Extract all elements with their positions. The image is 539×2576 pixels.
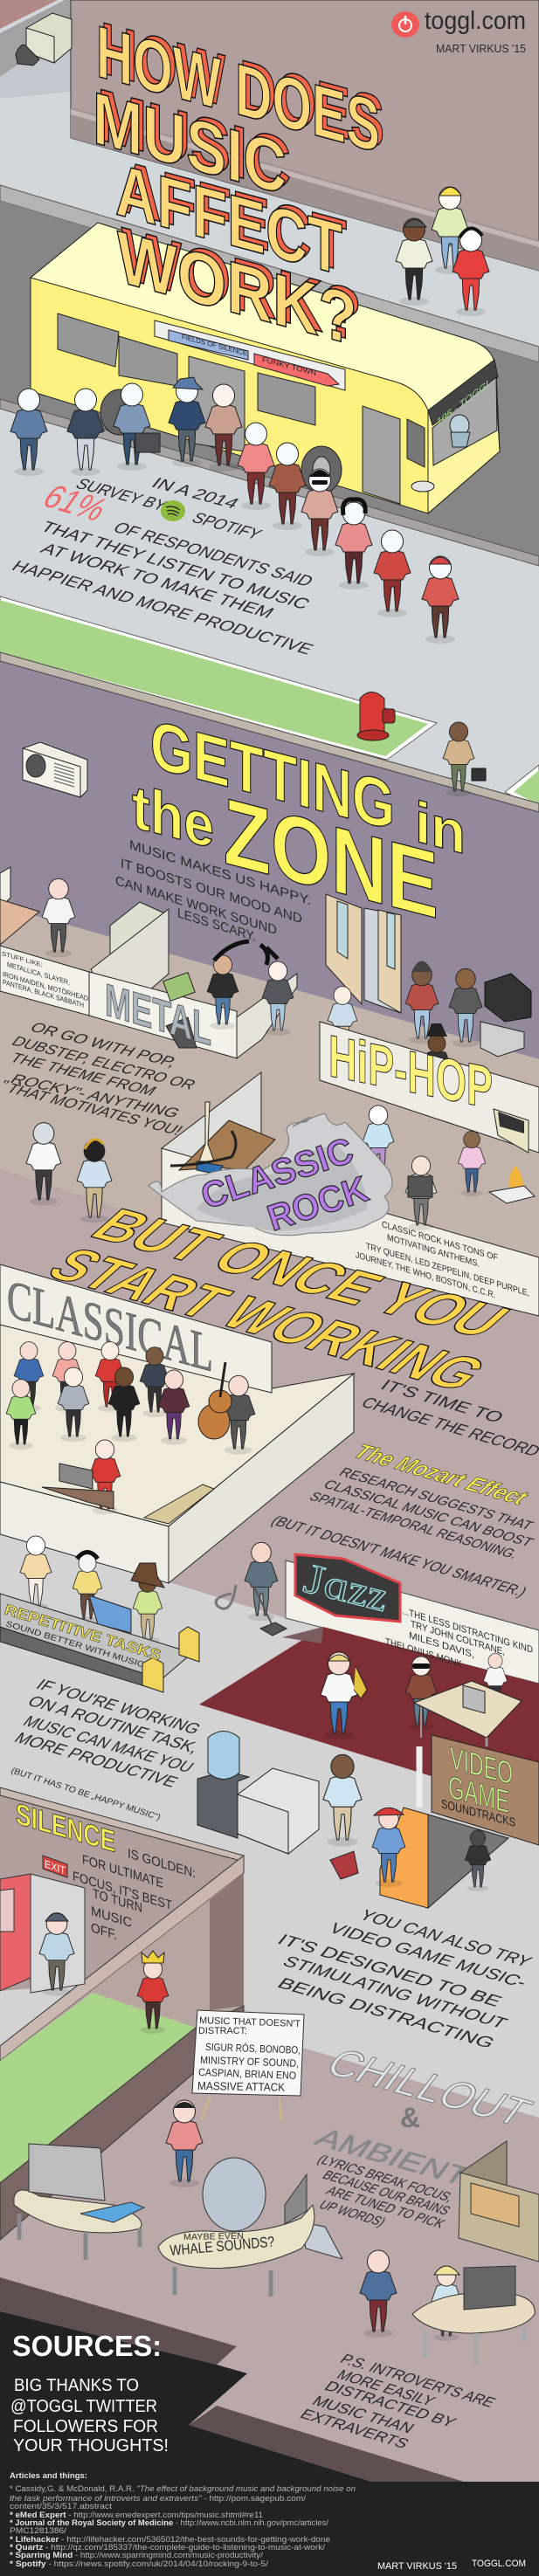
text: music makes us happy <box>115 837 311 945</box>
bus route sign <box>155 320 345 390</box>
panel: classic rock <box>149 1072 539 1316</box>
heading: chillout and ambient: AMBIENT <box>308 2124 476 2191</box>
title: AFFECT <box>120 145 347 288</box>
sources heading and thanks: BIG THANKS TO <box>14 2376 139 2395</box>
title: MUSIC <box>97 73 291 208</box>
character: man with clipboard <box>323 1754 362 1846</box>
bus route sign: FUNKY TOWN <box>262 355 316 377</box>
text: change the record: SPATIAL-TEMPORAL REASONING. <box>306 1490 522 1561</box>
sources heading and thanks: YOUR THOUGHTS! <box>13 2436 169 2455</box>
sources heading and thanks <box>10 2330 169 2455</box>
text: routine task: MORE PRODUCTIVE <box>10 1730 182 1791</box>
box and bag at top left <box>16 13 72 65</box>
characters: jazz musicians <box>321 1652 522 1746</box>
heading: but once you start working: START WORKING <box>34 1238 501 1400</box>
title: AFFECT <box>115 148 342 292</box>
heading: getting in the zone <box>132 705 466 940</box>
text: video game music <box>273 1907 536 2052</box>
text: music makes us happy: MUSIC MAKES US HAPPY. <box>129 837 311 908</box>
title <box>93 7 384 362</box>
exit door: EXIT <box>45 1857 66 1877</box>
panel: metal cubicle <box>0 867 297 1058</box>
sources list: * Spotify - https://news.spotify.com/uk/2014/04/10/rocking-9-to-5/ <box>10 2559 269 2568</box>
title: HOW DOES <box>100 7 384 165</box>
survey text: IN A 2014 <box>148 475 243 513</box>
panel: jazz <box>199 1553 539 1809</box>
survey text <box>8 475 317 658</box>
text: classic rock artists: JOURNEY, THE WHO, BOSTON, C.C.R. <box>356 1250 495 1300</box>
icon: spotify <box>161 500 185 521</box>
text: metal bands <box>2 950 90 1009</box>
windshield: 105 - TOGGL <box>437 376 491 429</box>
icon: fire hydrant <box>357 692 395 740</box>
text: routine task: IF YOU'RE WORKING <box>32 1677 204 1738</box>
survey text: HAPPIER AND MORE PRODUCTIVE <box>8 558 317 658</box>
text: introverts note: MUSIC THAN <box>308 2393 418 2436</box>
sign: jazz neon <box>295 1553 400 1622</box>
icon: power button <box>391 11 419 38</box>
character: king <box>137 1951 169 2034</box>
heading: getting in the zone: GETTING <box>150 705 395 845</box>
footer credits: TOGGL.COM <box>472 2559 526 2569</box>
text: metal bands: METALLICA, SLAYER, <box>7 961 70 987</box>
text: lyrics break focus: BECAUSE OUR BRAINS <box>319 2168 453 2218</box>
text: change the record: CHANGE THE RECORD <box>357 1395 539 1460</box>
text: lyrics break focus: (LYRICS BREAK FOCUS, <box>314 2152 457 2205</box>
text: or go with pop <box>1 1019 199 1138</box>
sign: music that doesn't distract: CASPIAN, BRIAN ENO <box>198 2066 296 2082</box>
text: whale sounds: MAYBE EVEN <box>183 2232 244 2242</box>
text: video game music: STIMULATING WITHOUT <box>279 1953 511 2032</box>
heading: metal: METAL <box>105 975 211 1056</box>
sources list: * Journal of the Royal Society of Medicine - http://www.ncbi.nlm.nih.gov/pmc/articles/ <box>10 2518 329 2527</box>
text: introverts note <box>296 2351 500 2451</box>
survey text: 61% <box>36 478 115 528</box>
heading: getting in the zone: in <box>415 789 466 867</box>
icon: cello <box>198 1362 231 1439</box>
character: businessman in tan coat <box>443 722 486 796</box>
text: classic rock artists: MOTIVATING ANTHEMS. <box>387 1233 480 1270</box>
door and hip-hop artists <box>326 894 531 1105</box>
sources heading and thanks: SOURCES: <box>12 2330 162 2362</box>
text: classic rock artists: CLASSIC ROCK HAS TONS OF <box>382 1220 498 1264</box>
text: routine task: MUSIC CAN MAKE YOU <box>19 1713 197 1776</box>
smoke cloud <box>149 1113 392 1236</box>
text: silence is golden: FOCUS, IT'S BEST <box>73 1869 173 1913</box>
text: introverts note: MORE EASILY <box>333 2366 439 2409</box>
text: lyrics break focus: UP WORDS) <box>315 2198 389 2229</box>
panel: silence room <box>0 1787 244 2240</box>
sign: music that doesn't distract: MINISTRY OF SOUND, <box>200 2054 299 2070</box>
character: bouncer <box>39 1913 74 1996</box>
text: introverts note: P.S. INTROVERTS ARE <box>336 2351 500 2410</box>
left desk with monitor <box>14 2144 144 2260</box>
sources heading and thanks: FOLLOWERS FOR <box>13 2417 158 2436</box>
sources list: PMC1281386/ <box>10 2526 67 2535</box>
sign: music that doesn't distract: MASSIVE ATTACK <box>197 2079 285 2094</box>
text: change the record: RESEARCH SUGGESTS THAT <box>335 1465 536 1533</box>
survey text: OF RESPONDENTS SAID <box>109 520 316 590</box>
text: or go with pop: THAT MOTIVATES YOU! <box>3 1080 186 1138</box>
text: video game music: VIDEO GAME MUSIC- <box>325 1920 530 1991</box>
characters: orchestra <box>6 1342 255 1514</box>
conveyor: repetitive tasks <box>0 1594 199 1692</box>
logo: toggl: toggl.com <box>425 7 526 35</box>
sign: music that doesn't distract: SIGUR RÓS, BONOBO, <box>205 2040 301 2056</box>
text: lyrics break focus: ARE TUNED TO PICK <box>322 2184 448 2231</box>
sources list: * Quartz - http://qz.com/185337/the-complete-guide-to-listening-to-music-at-work/ <box>10 2543 326 2552</box>
cubicle with corkboard <box>459 2141 539 2262</box>
sign: video game soundtracks <box>432 1735 539 1845</box>
icon: air conditioner <box>23 742 87 797</box>
text: routine task <box>10 1677 204 1822</box>
logo: toggl <box>391 7 526 55</box>
characters: commuters queue <box>10 377 459 644</box>
sources list: Articles and things: <box>10 2471 87 2481</box>
text: jazz artists: TRY JOHN COLTRANE, <box>411 1619 505 1657</box>
footer credits: MART VIRKUS '15 <box>377 2561 457 2572</box>
sources list: * Sparring Mind - http://www.sparringmind.com/music-productivity/ <box>10 2551 264 2559</box>
title: MUSIC <box>93 77 287 211</box>
text: metal bands: STUFF LIKE: <box>2 950 43 969</box>
text: music makes us happy: IT BOOSTS OUR MOOD AND <box>121 856 302 926</box>
survey text: SURVEY BY <box>72 476 171 514</box>
text: routine task: ON A ROUTINE TASK, <box>24 1693 203 1757</box>
characters: daft punk <box>26 1123 112 1223</box>
text: classic rock artists <box>356 1220 529 1300</box>
text: change the record: IT'S TIME TO <box>377 1377 507 1426</box>
text: jazz artists: THELONIUS MONK <box>385 1636 462 1670</box>
text: or go with pop: OR GO WITH POP, <box>26 1019 181 1070</box>
sources list: the task performance of introverts and extraverts" - http://pom.sagepub.com/ <box>10 2494 307 2503</box>
heading: classic rock: ROCK <box>262 1167 373 1239</box>
characters: classic rock fans <box>363 1105 535 1230</box>
bus wheel <box>100 389 342 493</box>
sign: jazz neon: Jazz <box>302 1553 386 1622</box>
sign: video game soundtracks: SOUNDTRACKS <box>441 1797 515 1830</box>
text: music makes us happy: LESS SCARY. <box>177 906 256 945</box>
text: silence is golden: FOR ULTIMATE <box>82 1852 163 1891</box>
title: WORK? <box>121 212 362 359</box>
conveyor: repetitive tasks: REPETITIVE TASKS <box>3 1601 163 1663</box>
sources list: * Cassidy,G. & McDonald, R.A.R. "The effect of background music and background noise on <box>10 2484 356 2493</box>
exit door <box>0 1856 85 1993</box>
heading: chillout and ambient: & <box>400 2102 420 2133</box>
text: video game music: YOU CAN ALSO TRY <box>356 1907 536 1971</box>
sources list: content/35/3/517.abstract <box>10 2502 113 2511</box>
characters: metal fans and office worker <box>42 878 294 1036</box>
panel: video game <box>330 1735 539 1908</box>
text: routine task: (BUT IT HAS TO BE „HAPPY MUSIC") <box>10 1767 162 1822</box>
text: change the record <box>267 1377 539 1600</box>
character: sam fisher <box>465 1830 491 1891</box>
heading: getting in the zone: ZONE <box>224 779 439 940</box>
title: WORK? <box>117 216 357 362</box>
sign: music that doesn't distract: DISTRACT: <box>198 2026 247 2036</box>
sign: music that doesn't distract: MUSIC THAT DOESN'T <box>199 2015 301 2029</box>
text: introverts note: DISTRACTED BY <box>321 2378 460 2430</box>
bus route sign: FIELDS OF SILENCE <box>182 333 248 358</box>
text: or go with pop: „ROCKY"- ANYTHING <box>1 1070 184 1120</box>
text: silence is golden <box>73 1846 196 1943</box>
sources list <box>10 2471 356 2568</box>
heading: silence: SILENCE <box>16 1798 115 1859</box>
title: HOW DOES <box>96 10 380 169</box>
character: praying man <box>166 2100 203 2187</box>
survey text: SPOTIFY <box>188 510 266 543</box>
sign: video game soundtracks: GAME <box>448 1769 509 1820</box>
heading: classic rock: CLASSIC <box>196 1129 358 1217</box>
heading: but once you start working: BUT ONCE YOU <box>78 1199 523 1347</box>
text: whale sounds: WHALE SOUNDS? <box>169 2234 275 2259</box>
whale at desk <box>158 2158 342 2297</box>
text: change the record: CLASSICAL MUSIC CAN BOOST <box>320 1477 536 1550</box>
text: introverts note: EXTRAVERTS <box>296 2406 412 2451</box>
sources list: * Lifehacker - http://lifehacker.com/5365012/the-best-sounds-for-getting-work-done <box>10 2535 330 2544</box>
character: janitor with vacuum <box>216 1542 287 1636</box>
character: mozart <box>42 1440 121 1514</box>
icon: hookah and table <box>170 1102 275 1174</box>
footer credits <box>377 2559 526 2572</box>
icon: water cooler and copier <box>197 1731 319 1854</box>
text: metal bands: PANTERA, BLACK SABBATH <box>3 978 84 1009</box>
bus <box>31 223 500 513</box>
text: silence is golden: TO TURN <box>93 1886 142 1916</box>
text: video game music: BEING DISTRACTING <box>273 1975 498 2052</box>
conveyor: repetitive tasks: SOUND BETTER WITH MUSIC <box>4 1620 145 1670</box>
character: mario <box>372 1808 405 1887</box>
sources heading and thanks: @TOGGL TWITTER <box>10 2397 157 2416</box>
survey text: THAT THEY LISTEN TO MUSIC <box>37 519 313 613</box>
characters: village people group <box>396 187 489 316</box>
survey text: AT WORK TO MAKE THEM <box>37 541 277 622</box>
heading: chillout and ambient <box>308 2041 539 2191</box>
sign: music that doesn't distract <box>192 2010 304 2120</box>
text: silence is golden: IS GOLDEN: <box>128 1846 196 1881</box>
text: silence is golden: MUSIC <box>91 1904 132 1931</box>
text: lyrics break focus <box>314 2152 457 2231</box>
characters: repetitive tasks workers <box>20 1536 164 1644</box>
text: metal bands: IRON MAIDEN, MOTÖRHEAD, <box>3 969 90 1003</box>
sources list: * eMed Expert - http://www.emedexpert.com/tips/music.shtml#re11 <box>10 2511 263 2519</box>
heading: getting in the zone: the <box>132 773 214 862</box>
text: video game music: IT'S DESIGNED TO BE <box>273 1932 506 2010</box>
text: or go with pop: THE THEME FROM <box>6 1050 161 1099</box>
heading: classical: CLASSICAL <box>7 1268 213 1383</box>
text: music makes us happy: CAN MAKE WORK SOUND <box>115 873 277 938</box>
panel: classical room <box>0 1264 354 1583</box>
logo: toggl: MART VIRKUS '15 <box>436 42 526 55</box>
text: silence is golden: OFF. <box>91 1920 117 1943</box>
text: jazz artists: MILES DAVIS, <box>409 1630 474 1660</box>
characters: ambient listeners at desk <box>360 2250 535 2365</box>
windshield <box>428 360 498 465</box>
text: or go with pop: DUBSTEP, ELECTRO OR <box>8 1033 199 1092</box>
